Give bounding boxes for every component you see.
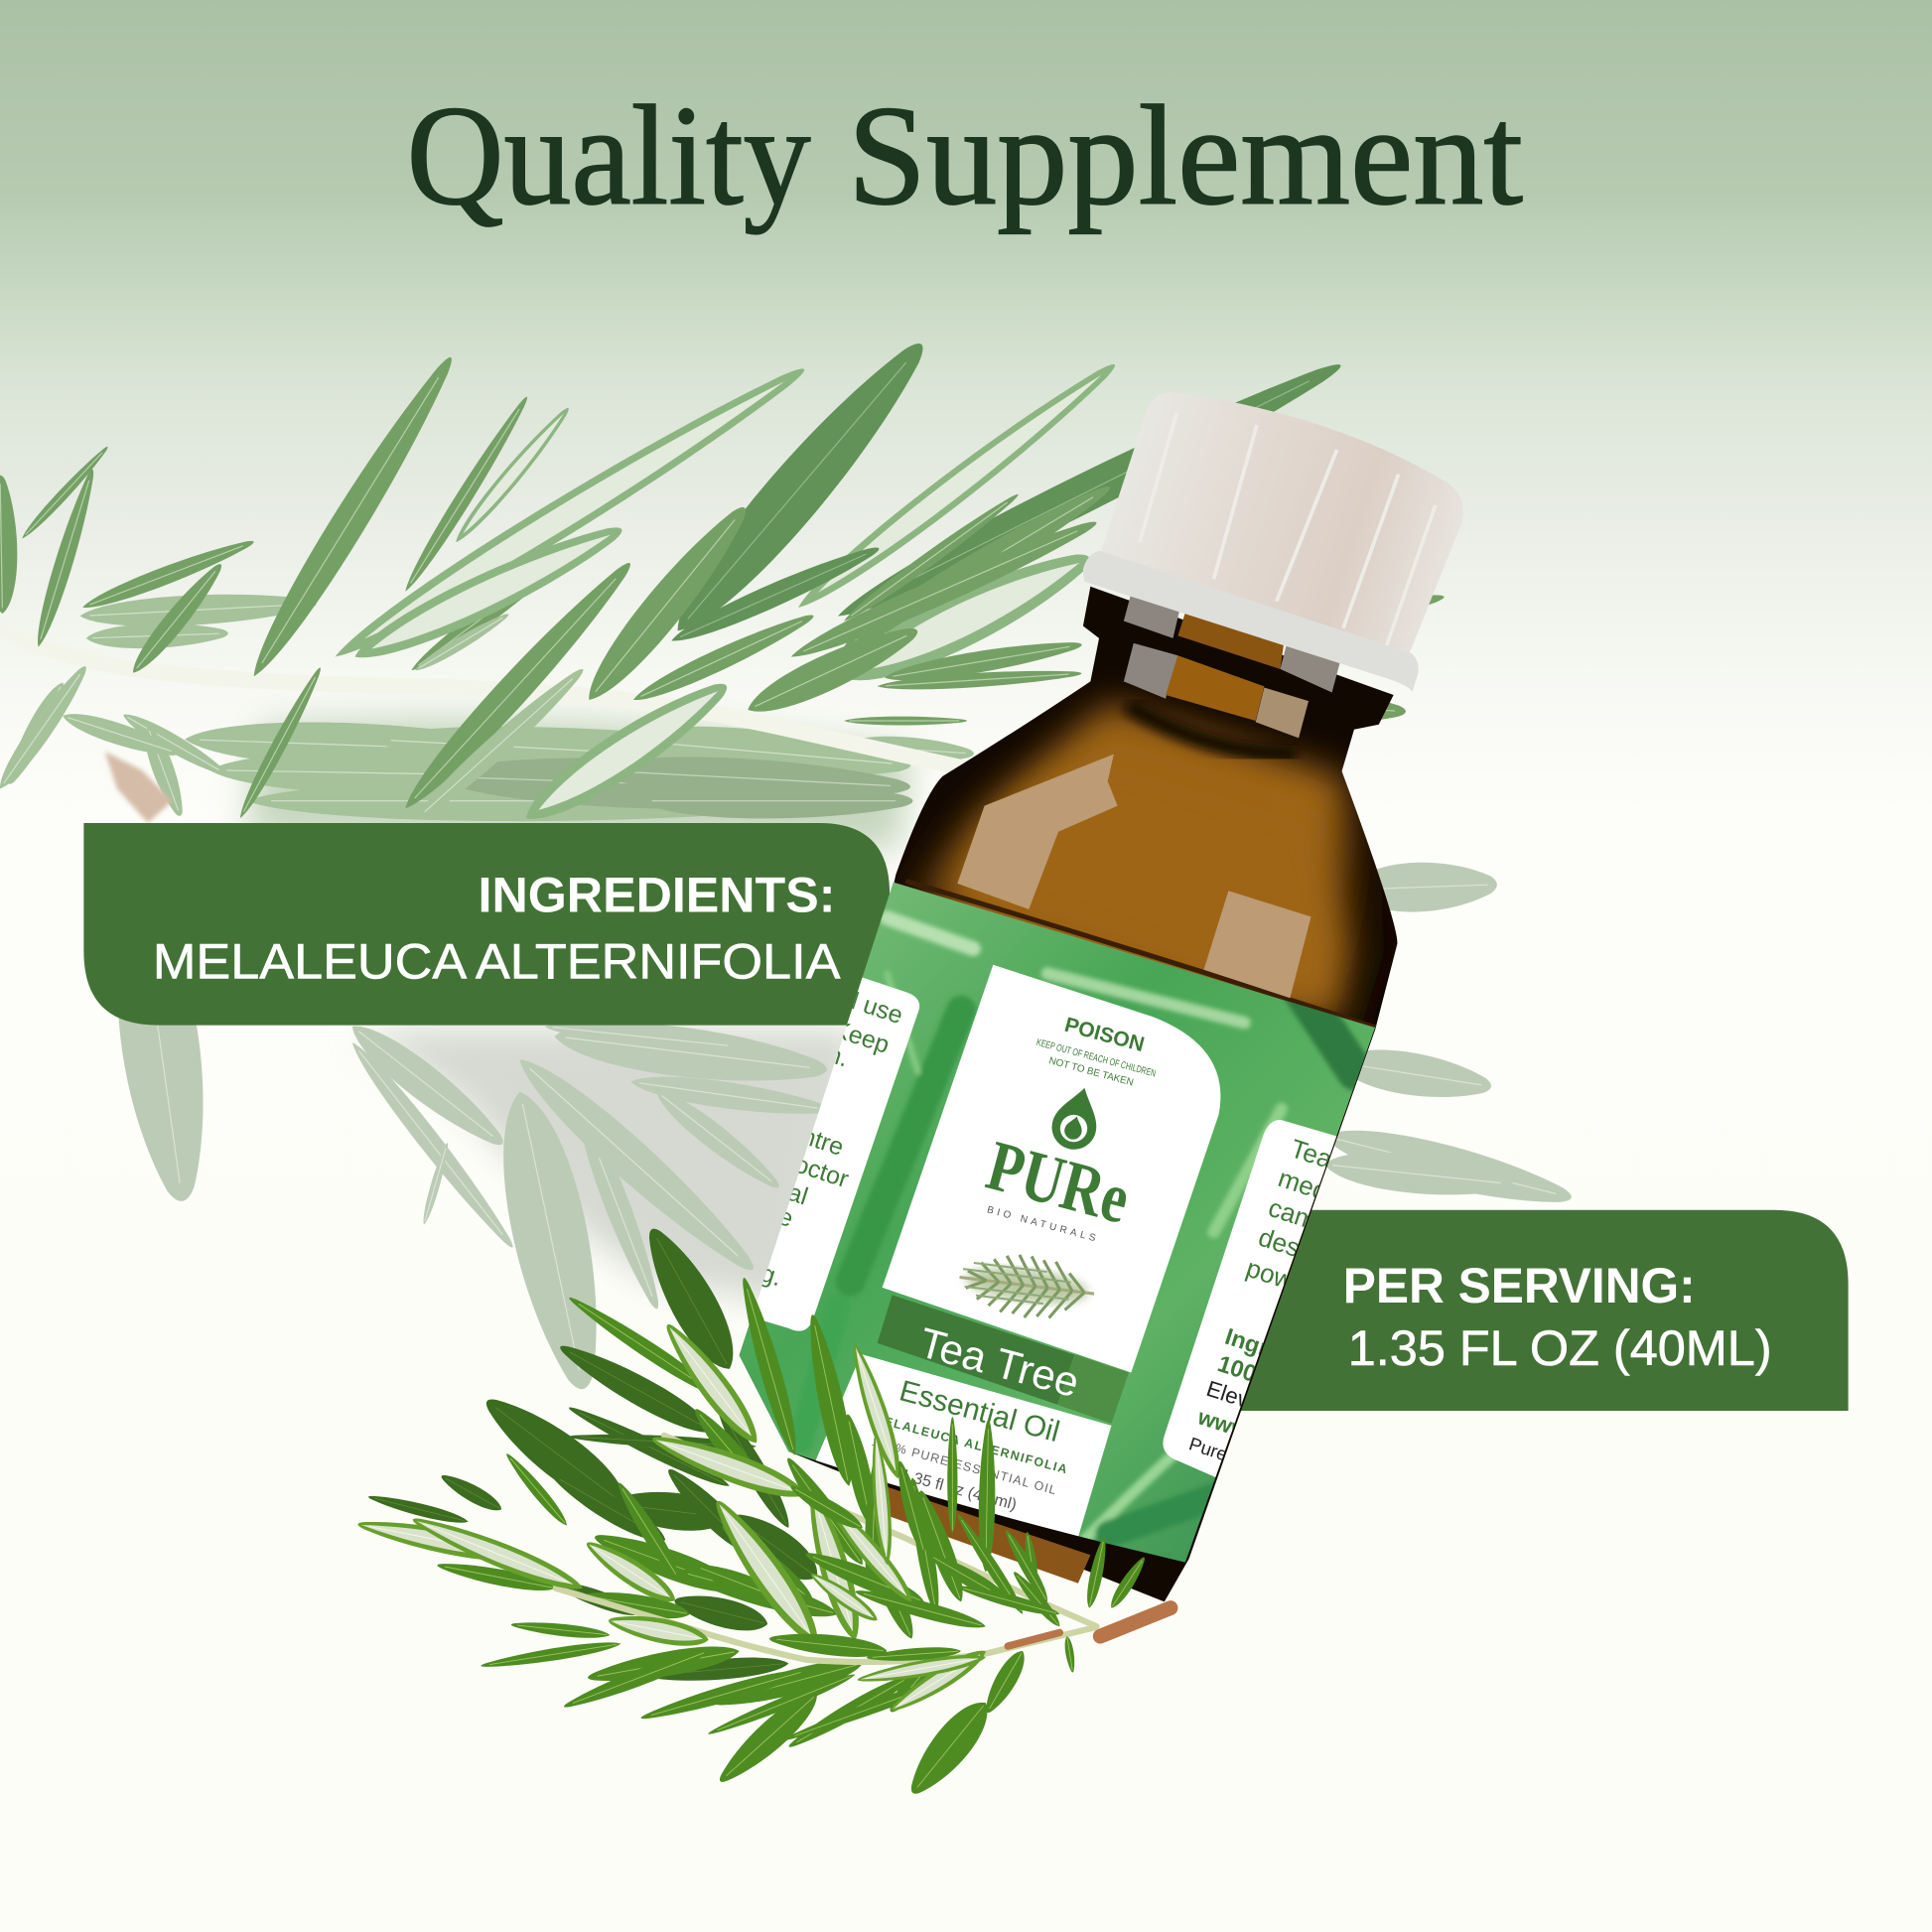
label right panel text: Tea — [1287, 1133, 1336, 1174]
label right panel text: Pure — [1186, 1433, 1230, 1464]
brand wordmark: BIO NATURALS — [986, 1204, 1100, 1245]
label left panel text: ng. — [745, 1256, 785, 1292]
background rosemary branch: faded lower — [103, 860, 1577, 1397]
label right panel text: www — [1194, 1404, 1252, 1444]
label left panel text: al — [784, 1179, 811, 1210]
branch leaves — [0, 327, 1447, 837]
label plant illustration — [959, 1254, 1094, 1318]
label product text: 1.35 fl oz (40 ml) — [898, 1465, 1019, 1514]
bottle base seen below label — [863, 1478, 1090, 1584]
label left white panel — [757, 977, 919, 1331]
bottle — [592, 392, 1463, 1601]
label right panel text: desc — [1255, 1222, 1316, 1267]
label left panel text: al use — [835, 984, 905, 1030]
callout: per serving: 1.35 FL OZ (40ML) — [1348, 1320, 1772, 1376]
label product text: Essential Oil — [896, 1374, 1063, 1449]
background rosemary branch: upper — [0, 327, 1447, 850]
label right panel text: pow — [1243, 1253, 1298, 1296]
label green band — [878, 1295, 1129, 1423]
callout: per serving: PER SERVING: — [1343, 1258, 1696, 1313]
label right white panel — [1163, 1120, 1336, 1477]
branch stem — [0, 628, 973, 770]
sprig stems — [556, 1436, 1171, 1662]
label background — [739, 882, 1375, 1563]
callout: ingredients: INGREDIENTS: — [479, 867, 835, 922]
bottle neck — [1124, 589, 1342, 755]
label heading: poison: NOT TO BE TAKEN — [1047, 1055, 1135, 1088]
icon: oil drop logo — [1052, 1088, 1096, 1150]
bottle glass body — [740, 587, 1397, 1601]
title: Quality — [407, 77, 811, 235]
label left panel text: octor — [791, 1151, 852, 1193]
label right panel text: 100 — [1214, 1350, 1260, 1387]
label right panel text — [1186, 1133, 1336, 1464]
label grass blades — [801, 918, 1355, 1540]
label product text: 100% PURE ESSENTIAL OIL — [871, 1435, 1059, 1497]
callout: ingredients — [83, 823, 890, 1026]
callout: per serving — [1109, 1210, 1849, 1411]
label product text: MELALEUCA ALTERNIFOLIA — [872, 1411, 1070, 1476]
label tea tree name: Tea Tree — [914, 1318, 1084, 1406]
label product text — [871, 1374, 1070, 1514]
label left panel text — [762, 991, 901, 1288]
branch lower foliage mass — [0, 589, 975, 850]
brand wordmark: PURe — [979, 1125, 1138, 1239]
label right panel text: med — [1275, 1163, 1331, 1206]
sprig leaves: front layer — [355, 1275, 1150, 1719]
bottle highlights — [957, 755, 1311, 998]
title: Supplement — [848, 77, 1523, 235]
label left panel text: e — [775, 1203, 796, 1233]
brand wordmark — [985, 1142, 1126, 1241]
label right panel text: Ingr — [1222, 1323, 1272, 1361]
label right panel text: Elev — [1203, 1376, 1253, 1413]
label left panel text: n. — [824, 1040, 852, 1072]
bottle label — [739, 882, 1375, 1563]
label left panel text: ntre — [798, 1123, 847, 1162]
label heading: poison — [1036, 1017, 1156, 1086]
foreground rosemary sprig — [355, 1218, 1171, 1804]
label heading: poison: POISON — [1062, 1014, 1147, 1056]
sprig leaves: back layer — [367, 1218, 1032, 1804]
callout: ingredients: MELALEUCA ALTERNIFOLIA — [153, 933, 840, 989]
soft shadow behind branch — [357, 1029, 863, 1307]
label right panel text: cam — [1265, 1192, 1320, 1236]
label left panel text: Keep — [829, 1016, 893, 1059]
label centre white panel — [883, 965, 1220, 1373]
bottle cap — [1083, 392, 1463, 692]
label lower white panel — [813, 1354, 1111, 1542]
label heading: poison: KEEP OUT OF REACH OF CHILDREN — [1035, 1037, 1157, 1080]
